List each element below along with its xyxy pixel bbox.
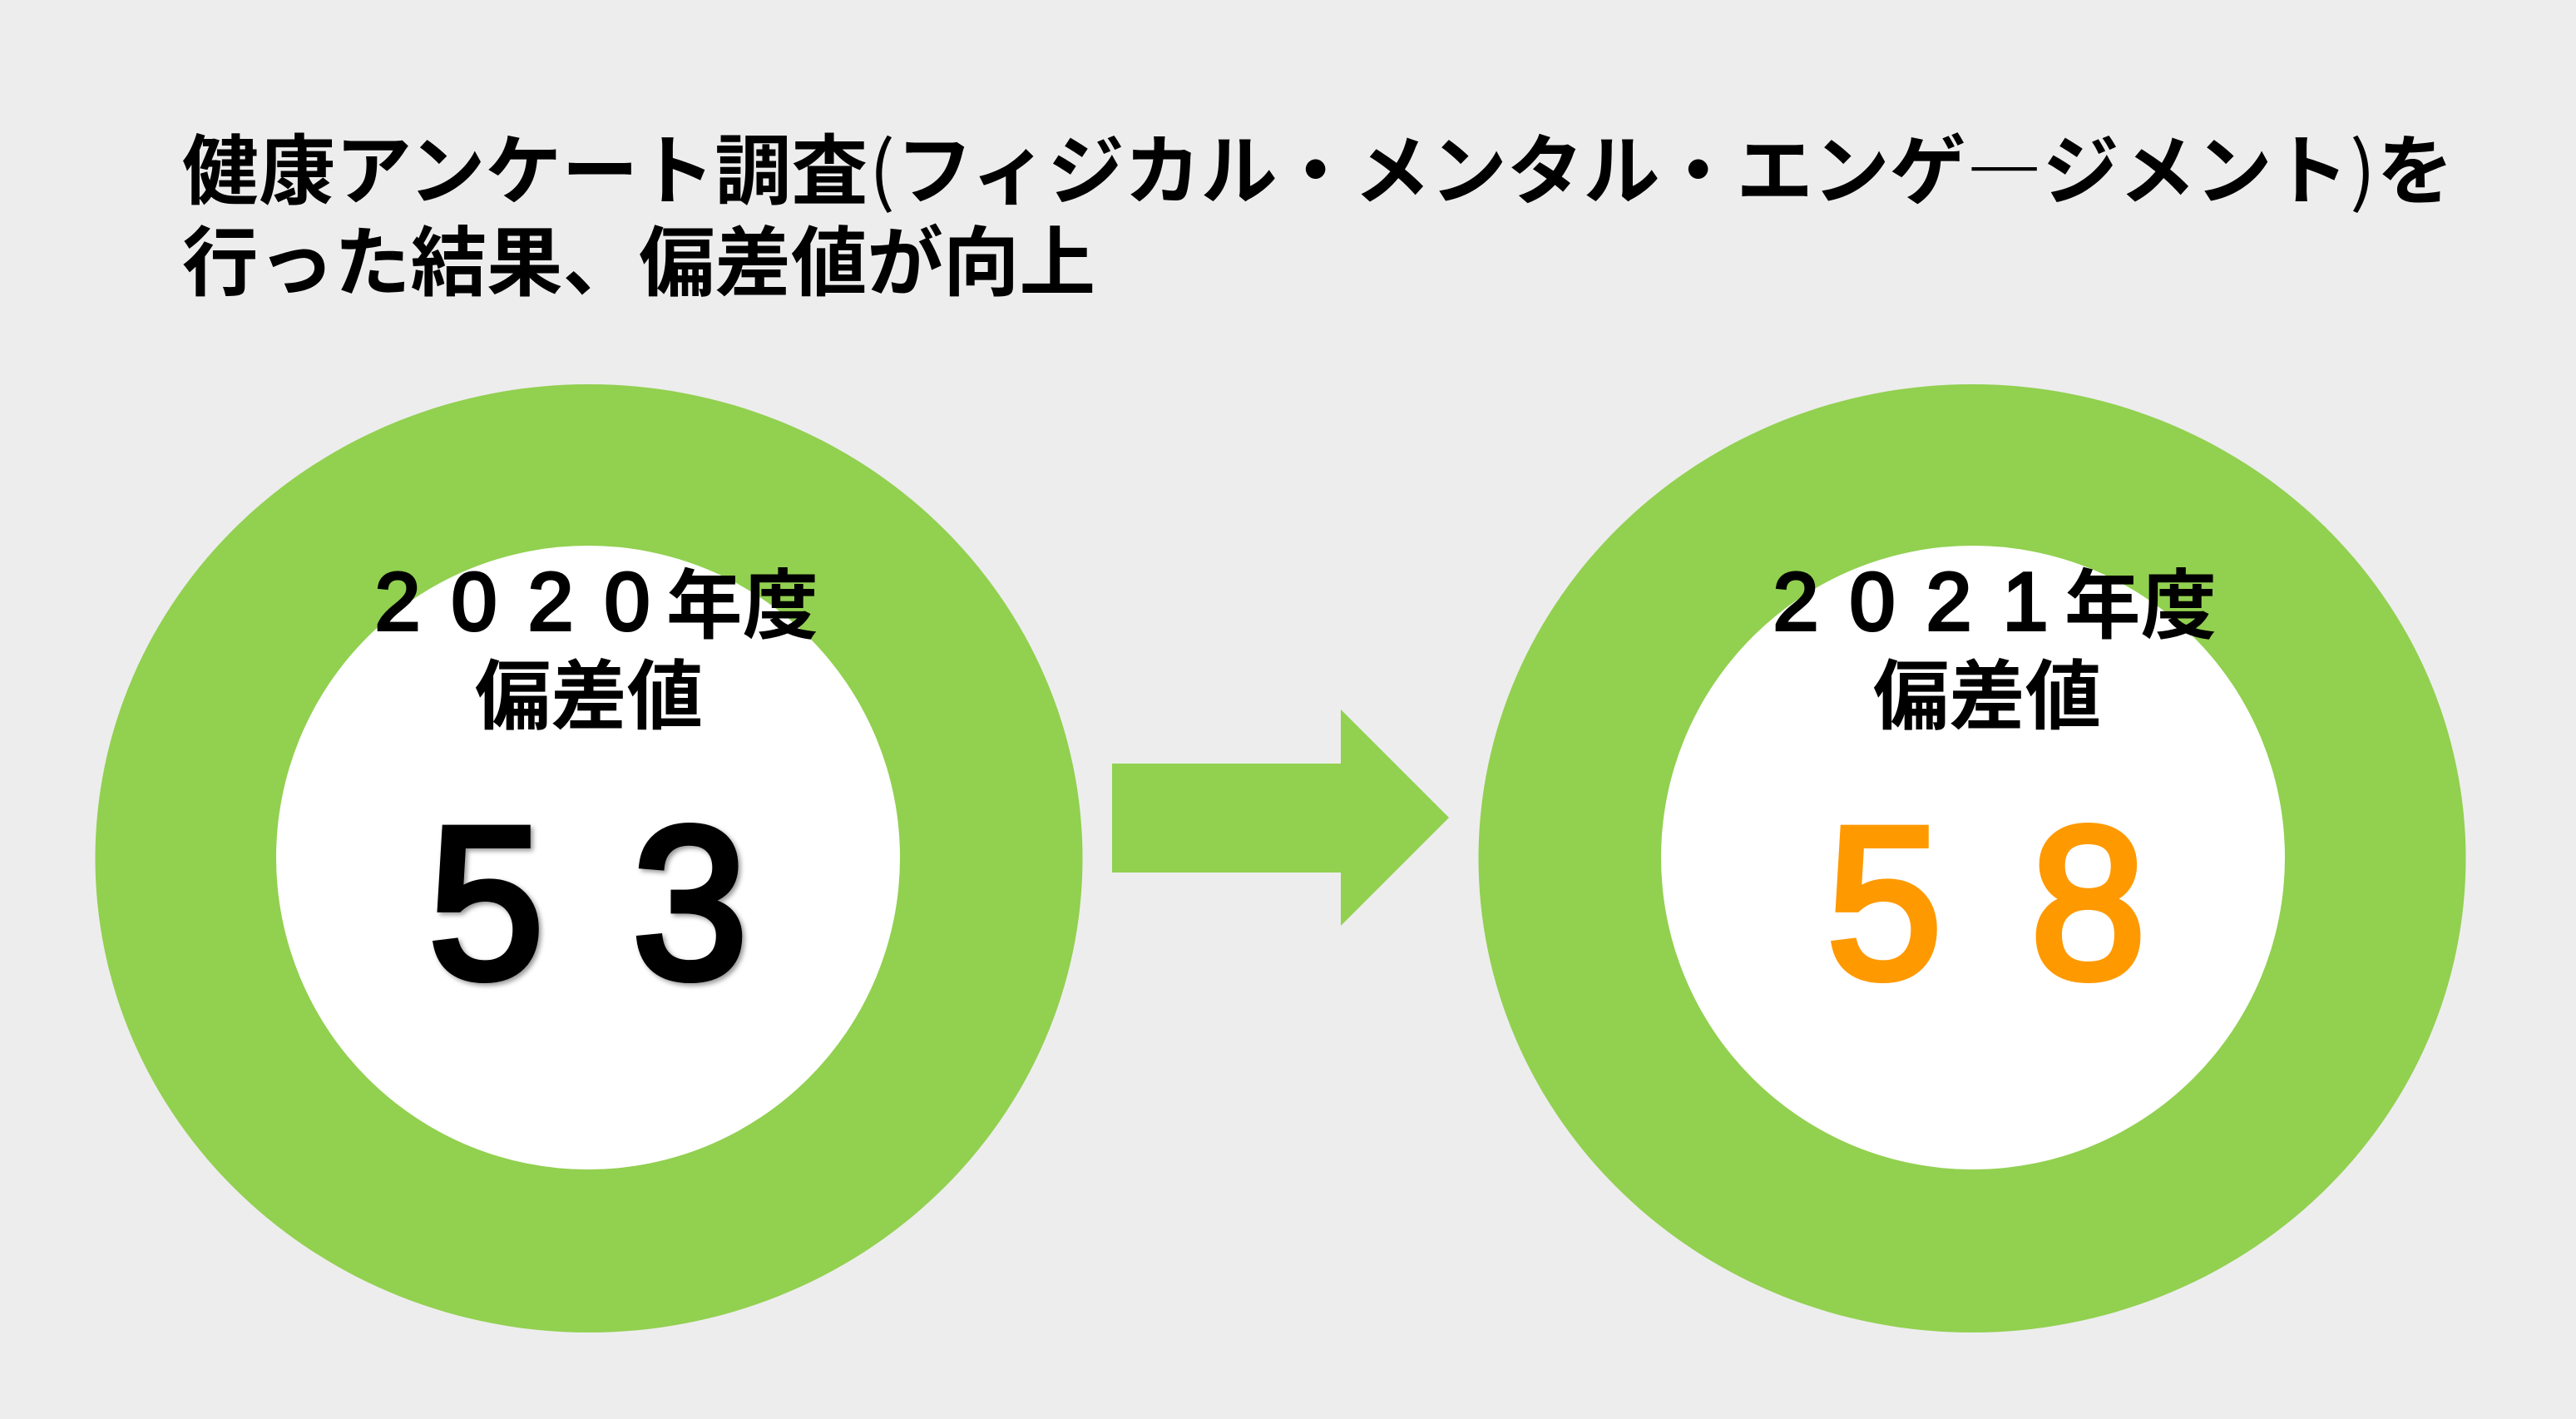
label: 2020 year: 0 (605, 556, 650, 647)
title: 行った結果、偏差値が向上 (182, 202, 1095, 312)
value: 53 (428, 782, 748, 1024)
outer green ellipse (95, 384, 1083, 1332)
label: 2021 year (1773, 545, 2217, 655)
panel: 2021 score circle (1479, 384, 2465, 1332)
panel: 2020 score circle (95, 384, 1083, 1332)
label: 2021 year: 1 (2003, 556, 2048, 647)
label: 2020 year: 2 (375, 556, 420, 647)
label: 2021 year: 年度 (2064, 545, 2217, 655)
label: 2021 year: 0 (1850, 556, 1895, 647)
label: deviation value: 偏差値 (1873, 635, 2101, 745)
value: 58: 8 (2030, 782, 2146, 1024)
label: 2021 year: 2 (1926, 556, 1971, 647)
inner white circle (276, 546, 900, 1169)
title (182, 110, 2454, 312)
label: 2020 year (375, 545, 818, 655)
value: 53: 5 (428, 782, 544, 1024)
value: 53: 3 (632, 782, 748, 1024)
value: 58 (1827, 782, 2146, 1024)
arrow (1112, 710, 1449, 926)
label: 2020 year: 年度 (666, 545, 818, 655)
label: 2020 year: 2 (528, 556, 573, 647)
label: 2021 year: 2 (1773, 556, 1818, 647)
label: 2020 year: 0 (452, 556, 497, 647)
outer green ellipse (1479, 384, 2465, 1332)
label: deviation value: 偏差値 (475, 635, 703, 745)
inner white circle (1661, 546, 2285, 1169)
value: 58: 5 (1827, 782, 1942, 1024)
title: 健康アンケート調査(フィジカル・メンタル・エンゲ―ジメント)を (182, 110, 2454, 220)
